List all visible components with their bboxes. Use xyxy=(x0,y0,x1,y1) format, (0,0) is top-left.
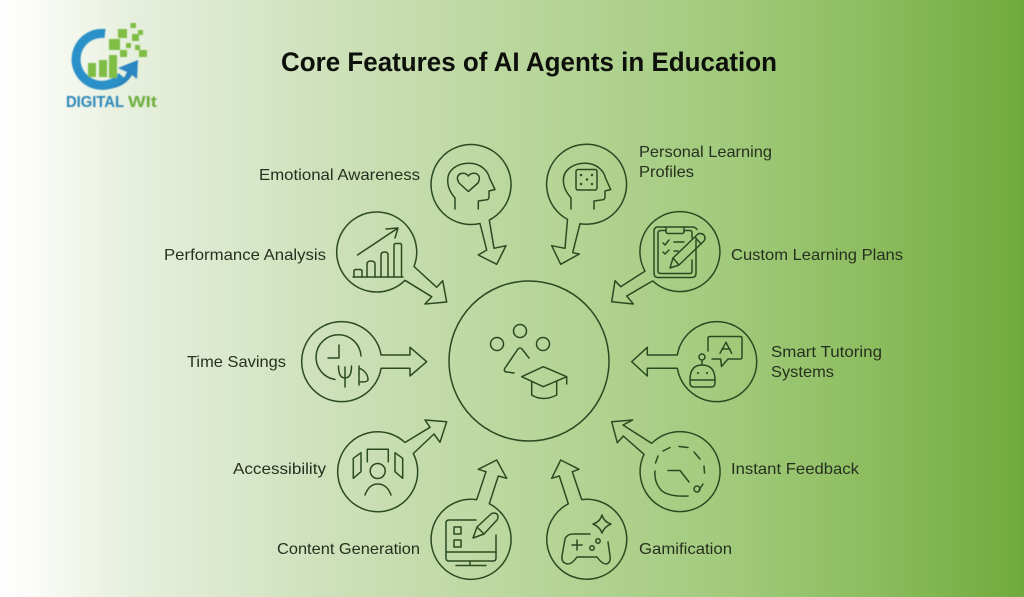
feature: Custom Learning Plans: Custom Learning Plans xyxy=(731,247,903,264)
feature: Gamification xyxy=(547,460,732,579)
icon: person with panels xyxy=(353,449,403,495)
feature: Time Savings: Time Savings xyxy=(187,354,286,371)
icon: game controller and sparkle xyxy=(562,515,611,564)
feature: Content Generation xyxy=(277,460,511,579)
feature: Personal Learning Profiles: Personal Learning xyxy=(639,144,772,161)
feature: Emotional Awareness xyxy=(259,145,511,264)
feature: Content Generation: Content Generation xyxy=(277,541,420,558)
circle and arrow xyxy=(338,420,447,512)
feature: Smart Tutoring Systems: Systems xyxy=(771,364,834,381)
icon: monitor with pencil xyxy=(446,513,498,566)
circle and arrow xyxy=(431,145,511,264)
circle and arrow xyxy=(632,322,757,402)
feature: Instant Feedback xyxy=(612,420,860,512)
logo: Digital Wit xyxy=(66,23,158,111)
feature: Custom Learning Plans xyxy=(612,212,903,304)
feature: Smart Tutoring Systems xyxy=(632,322,882,402)
icon: robot with speech bubble xyxy=(690,336,742,387)
logo: Digital Wit: WIt xyxy=(128,94,158,111)
feature: Personal Learning Profiles xyxy=(547,144,772,264)
circle and arrow xyxy=(547,144,627,264)
circle and arrow xyxy=(612,420,720,512)
feature: Performance Analysis: Performance Analysis xyxy=(164,247,326,264)
feature: Performance Analysis xyxy=(164,212,447,304)
feature: Instant Feedback: Instant Feedback xyxy=(731,461,860,478)
feature: Smart Tutoring Systems: Smart Tutoring xyxy=(771,344,882,361)
circle and arrow xyxy=(337,212,447,304)
feature: Gamification: Gamification xyxy=(639,541,732,558)
central hub circle xyxy=(449,281,609,441)
icon: clipboard and pencil xyxy=(654,227,705,278)
circle and arrow xyxy=(431,460,511,579)
icon: head with heart xyxy=(448,163,495,209)
icon: clock with plant shapes xyxy=(316,335,368,387)
icon: ideas and graduation cap xyxy=(490,324,567,398)
circle and arrow xyxy=(302,322,427,402)
feature: Personal Learning Profiles: Profiles xyxy=(639,164,694,181)
circle and arrow xyxy=(612,212,720,304)
title: Core Features of AI Agents in Education xyxy=(281,47,777,77)
icon: rising bar chart xyxy=(353,228,403,277)
logo: Digital Wit: DIGITAL xyxy=(66,94,124,111)
icon: dashed timer dial xyxy=(655,446,704,496)
feature: Time Savings xyxy=(187,322,427,402)
feature: Accessibility: Accessibility xyxy=(233,461,326,478)
circle and arrow xyxy=(547,460,627,579)
icon: head with dice xyxy=(563,163,611,209)
feature: Accessibility xyxy=(233,420,447,512)
feature: Emotional Awareness: Emotional Awareness xyxy=(259,167,420,184)
